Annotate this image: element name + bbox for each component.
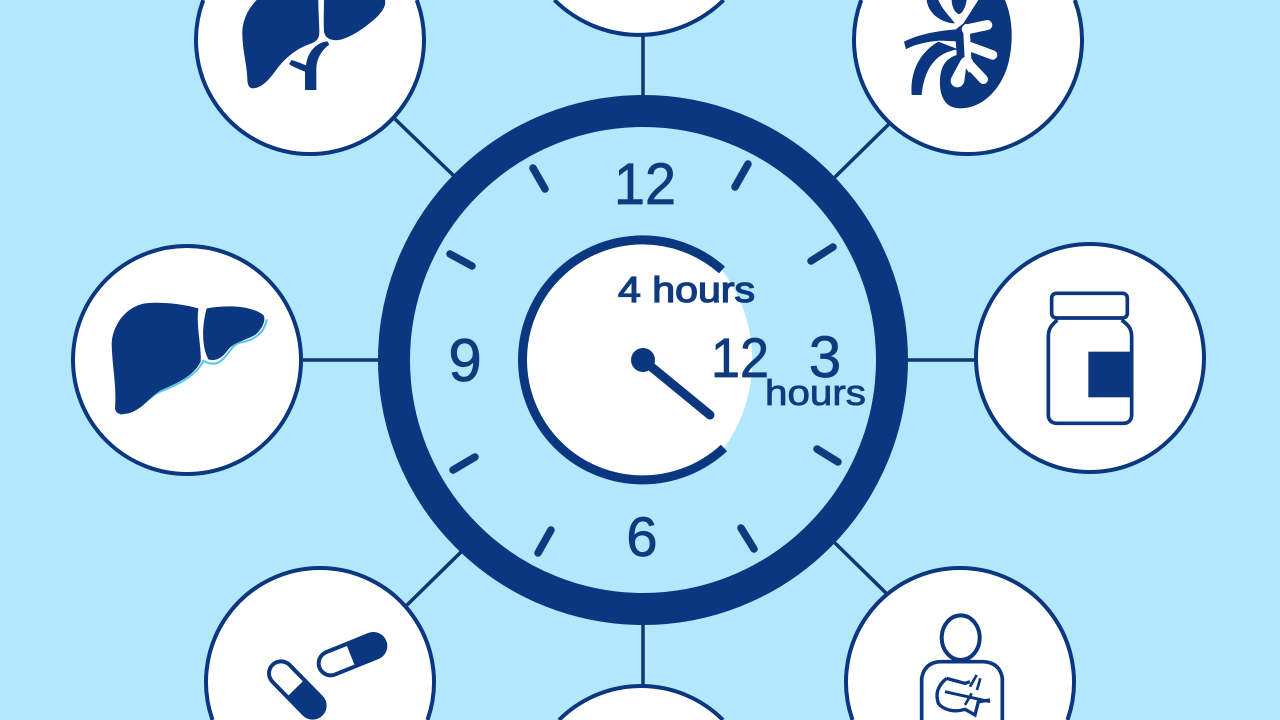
clock hand [631, 348, 710, 415]
label: hours: hours [765, 372, 866, 413]
icon: capsules, bottom left [206, 568, 434, 720]
icon: kidney, top right [854, 0, 1082, 154]
clock numeral 9: 9 [448, 327, 482, 394]
inner dial white face [523, 240, 752, 480]
connector lines from clock to icons [300, 30, 978, 690]
clock numeral 12: 12 [614, 152, 676, 217]
icon: top centre circle [554, 0, 724, 35]
label: 4 hours: 4 hours [618, 269, 755, 310]
kidney white calyx tree [957, 25, 993, 81]
icon: bottom centre circle [559, 686, 723, 720]
clock tick marks [450, 164, 838, 553]
kidney body [940, 0, 1012, 108]
upper middle lobe [952, 0, 967, 14]
lower capsule [271, 663, 313, 706]
upper left lobe [927, 0, 955, 23]
clock outer ring [394, 111, 892, 609]
renal vein [911, 42, 958, 95]
clock numeral 3: 3 [809, 325, 841, 390]
kidney inner wedge [963, 68, 978, 88]
inner numeral 12: 12 [711, 326, 769, 389]
icon: person with organ outline, bottom right [846, 568, 1074, 720]
inner dial arc [523, 240, 724, 480]
icon: liver and bile duct, top left [196, 0, 424, 154]
clock [394, 111, 892, 609]
clock numeral 6: 6 [626, 505, 658, 568]
icon: liver, left [73, 246, 301, 474]
upper capsule [321, 646, 373, 673]
renal artery [904, 29, 963, 49]
icon: medicine bottle, right [976, 244, 1204, 472]
